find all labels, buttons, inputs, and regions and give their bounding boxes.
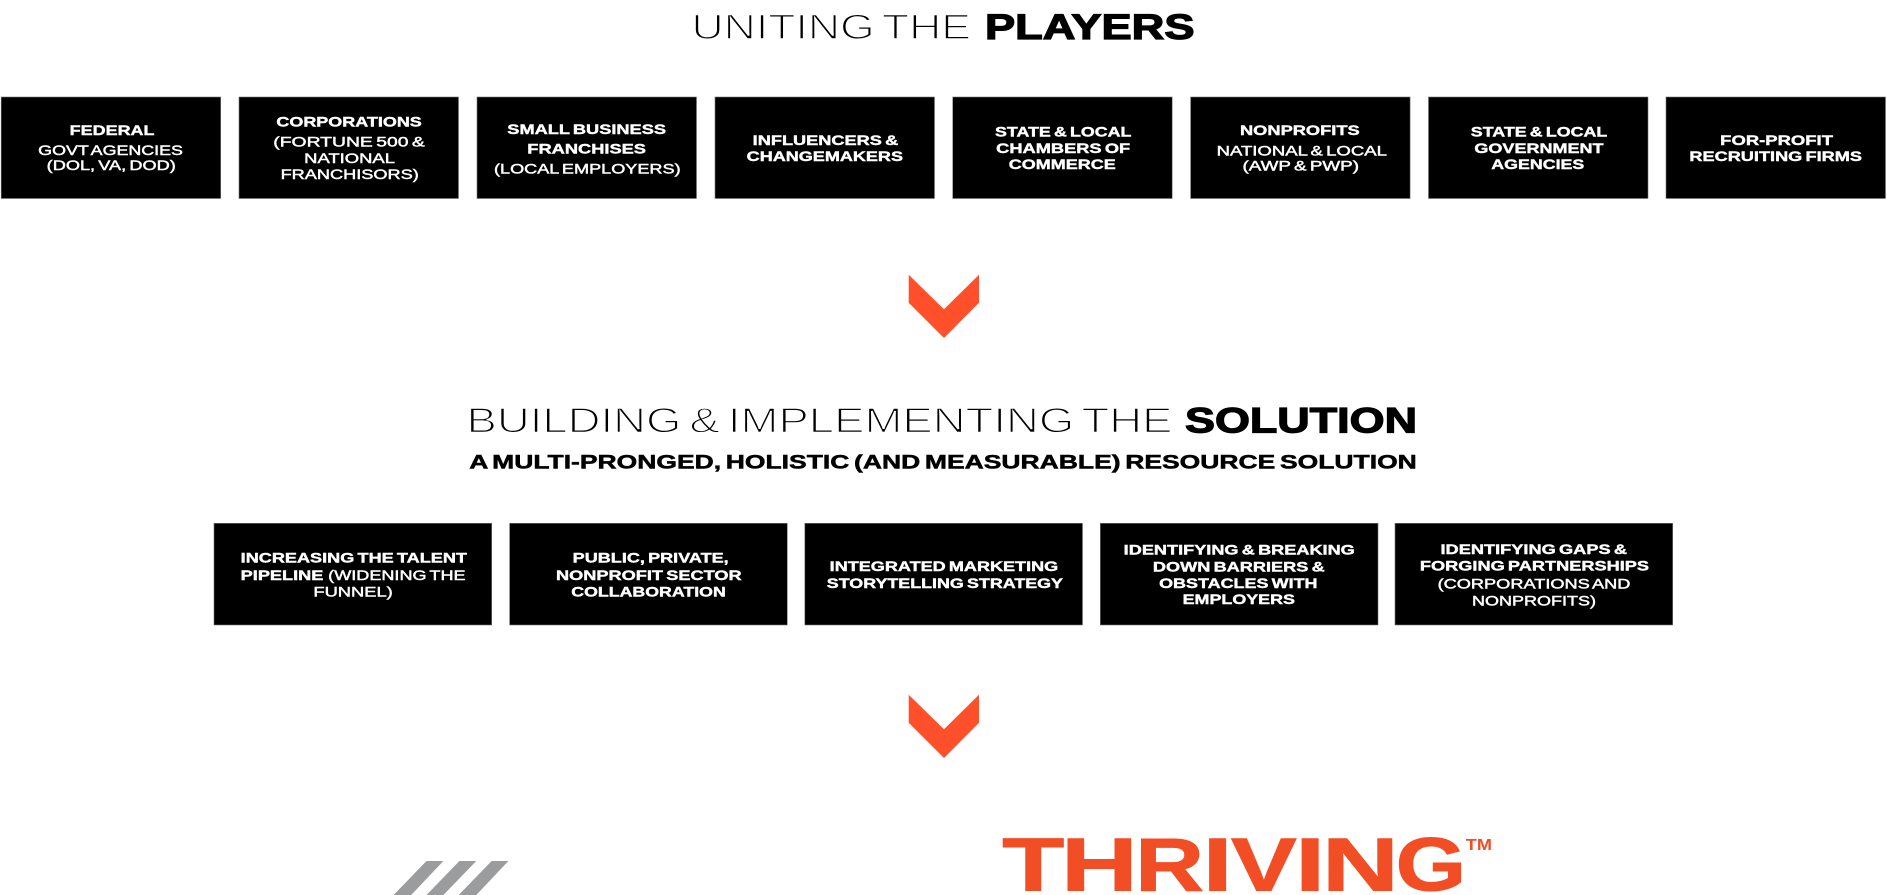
panel: sector collaboration: PUBLIC, PRIVATE, [573, 551, 729, 566]
panel: corporations: CORPORATIONS [276, 115, 422, 130]
panel: federal: FEDERAL [70, 123, 154, 138]
panel: recruiting firms: RECRUITING FIRMS [1689, 149, 1862, 164]
panel: corporations: (FORTUNE 500 & [273, 135, 425, 150]
wordmark: thriving: TM [1466, 837, 1492, 854]
panel: small business franchises: FRANCHISES [527, 141, 646, 156]
panel: federal: (DOL, VA, DOD) [47, 158, 176, 173]
panel: breaking down barriers [1100, 523, 1378, 625]
panel: chambers of commerce: STATE & LOCAL [995, 125, 1131, 140]
arrow: chevron down [909, 275, 979, 338]
panel: nonprofits: NONPROFITS [1240, 123, 1360, 138]
panel: sector collaboration [510, 523, 787, 625]
panel: recruiting firms [1666, 97, 1886, 198]
panel: chambers of commerce: COMMERCE [1009, 157, 1116, 172]
panel: forging partnerships [1395, 523, 1673, 625]
panel: small business franchises: (LOCAL EMPLOYERS) [494, 161, 681, 176]
panel: influencers [715, 97, 934, 198]
logo mark: grey stripes [394, 861, 508, 895]
panel: corporations: NATIONAL [304, 151, 396, 166]
panel: government agencies: AGENCIES [1491, 157, 1584, 172]
heading: building and implementing the solution: SOLUTION [1185, 402, 1417, 441]
panel: breaking down barriers: OBSTACLES WITH [1159, 576, 1318, 591]
panel: forging partnerships: (CORPORATIONS AND [1438, 577, 1631, 592]
panel: marketing strategy: STORYTELLING STRATEGY [827, 576, 1063, 591]
panel: influencers: INFLUENCERS & [753, 133, 898, 148]
panel: small business franchises: SMALL BUSINESS [507, 122, 666, 137]
panel: forging partnerships: FORGING PARTNERSHIPS [1420, 559, 1649, 574]
heading: building and implementing the solution: BUILDING & IMPLEMENTING THE [466, 402, 1172, 441]
panel: small business franchises [477, 97, 696, 198]
panel: talent pipeline: (WIDENING THE [328, 568, 466, 583]
panel: breaking down barriers: DOWN BARRIERS & [1153, 559, 1325, 574]
panel: government agencies [1428, 97, 1648, 198]
panel: breaking down barriers: IDENTIFYING & BREAKING [1124, 542, 1355, 557]
panel: government agencies: GOVERNMENT [1474, 141, 1605, 156]
panel: corporations [239, 97, 458, 198]
panel: talent pipeline: INCREASING THE TALENT [241, 551, 468, 566]
panel: talent pipeline: FUNNEL) [313, 585, 393, 600]
panel: talent pipeline [214, 523, 492, 625]
panel: sector collaboration: NONPROFIT SECTOR [556, 568, 742, 583]
heading: uniting the players: UNITING THE [692, 8, 971, 47]
panel: marketing strategy: INTEGRATED MARKETING [830, 559, 1058, 574]
wordmark: thriving [1002, 823, 1492, 895]
panel: government agencies: STATE & LOCAL [1471, 125, 1607, 140]
panel: federal: GOVT AGENCIES [38, 143, 183, 158]
heading: uniting the players [692, 8, 1194, 47]
panel: corporations: FRANCHISORS) [281, 167, 419, 182]
panel: chambers of commerce [953, 97, 1172, 198]
subheading: A MULTI-PRONGED, HOLISTIC (AND MEASURABLE) RESOURCE SOLUTION [469, 451, 1417, 473]
panel: federal [1, 97, 221, 198]
panel: nonprofits [1191, 97, 1410, 198]
panel: forging partnerships: IDENTIFYING GAPS & [1440, 542, 1627, 557]
panel: forging partnerships: NONPROFITS) [1472, 594, 1596, 609]
heading: building and implementing the solution [466, 402, 1417, 441]
panel: recruiting firms: FOR-PROFIT [1720, 133, 1834, 148]
panel: breaking down barriers: EMPLOYERS [1183, 592, 1295, 607]
panel: talent pipeline: PIPELINE [241, 568, 323, 583]
arrow: chevron down [909, 695, 979, 758]
panel: sector collaboration: COLLABORATION [571, 585, 726, 600]
heading: uniting the players: PLAYERS [985, 8, 1194, 47]
panel: marketing strategy [805, 523, 1082, 625]
panel: influencers: CHANGEMAKERS [747, 149, 903, 164]
panel: nonprofits: (AWP & PWP) [1242, 158, 1359, 173]
panel: nonprofits: NATIONAL & LOCAL [1217, 143, 1387, 158]
panel: chambers of commerce: CHAMBERS OF [996, 141, 1130, 156]
